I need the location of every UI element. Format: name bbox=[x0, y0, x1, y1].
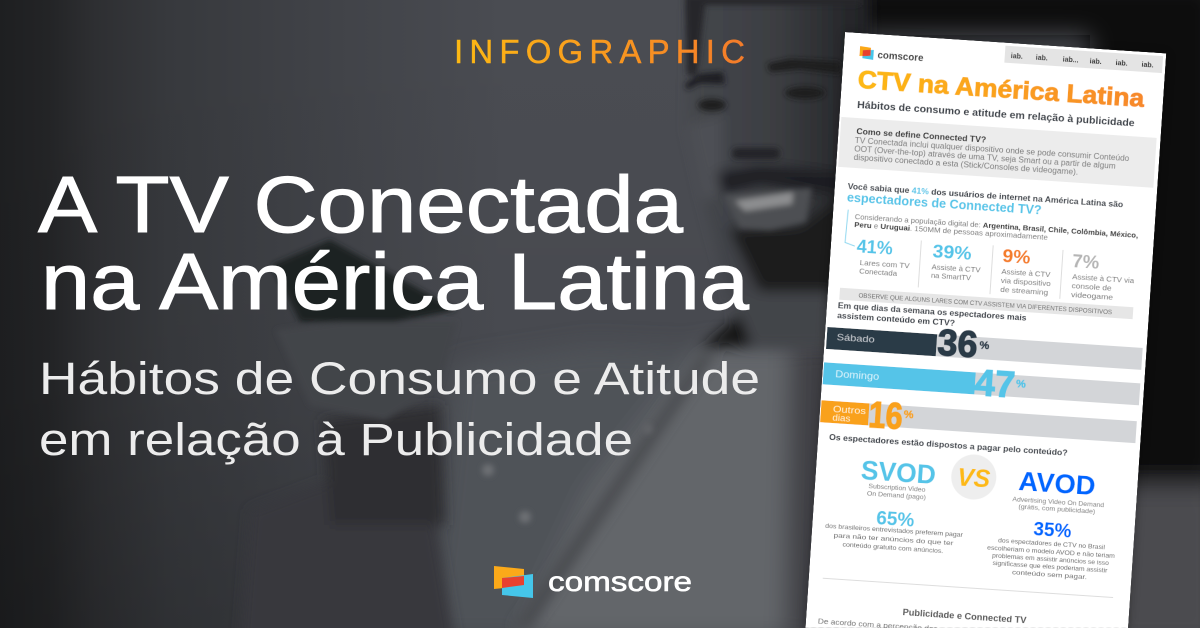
AVOD heading: (grátis, com publicidade) bbox=[1018, 505, 1095, 516]
stat: SVOD 65%: conteúdo gratuito com anúncios. bbox=[842, 542, 944, 555]
stat: 39% bbox=[931, 244, 981, 280]
bar: Sábado 36% bbox=[826, 327, 1143, 370]
stat: 41% bbox=[856, 240, 910, 276]
population note: Considerando a população digital de: Argentina, Brasil, Chile, Colômbia, México, bbox=[854, 212, 1138, 240]
bracket line bbox=[844, 210, 855, 247]
stat: 39%: na SmartTV bbox=[931, 271, 971, 282]
stat: AVOD 35%: conteúdo sem pagar. bbox=[1012, 570, 1087, 581]
partner logos strip: iab. bbox=[1115, 60, 1128, 68]
stat: AVOD 35%: 35% bbox=[1033, 519, 1072, 543]
bar: Outros dias 16%: 16 bbox=[867, 394, 904, 437]
sheet shadow bbox=[805, 33, 1166, 628]
stat: 41%: Conectada bbox=[859, 266, 898, 278]
main title: na América Latina bbox=[41, 237, 750, 326]
note bar: OBSERVE QUE ALGUNS LARES COM CTV ASSISTEM VIA DIFERENTES DISPOSITIVOS bbox=[858, 293, 1112, 316]
partner logos strip: iab... bbox=[1062, 56, 1079, 65]
bar: Domingo 47%: 47 bbox=[974, 362, 1016, 405]
partner logos strip: iab. bbox=[1035, 55, 1048, 62]
comscore logo bbox=[494, 566, 692, 598]
question: willingness to pay: Os espectadores estão dispostos a pagar pelo conteúdo? bbox=[829, 432, 1068, 458]
panel: definition: dispositivo conectado a esta (Stick/Consoles de videogame). bbox=[853, 153, 1079, 177]
stat: AVOD 35%: significasse que eles poderiam assistir bbox=[992, 561, 1108, 575]
stat: 7% bbox=[1071, 254, 1134, 300]
sheet logo bbox=[859, 46, 924, 62]
sheet subtitle: Hábitos de consumo e atitude em relação à publicidade bbox=[857, 99, 1135, 129]
AVOD heading: AVOD bbox=[1018, 466, 1096, 501]
bar: Sábado 36%: Sábado bbox=[836, 332, 875, 346]
stat: SVOD 65%: para não ter anúncios do que ter bbox=[833, 533, 953, 547]
stat: 41%: 41% bbox=[856, 236, 893, 259]
infographic sheet preview bbox=[805, 32, 1166, 628]
SVOD heading: SVOD bbox=[860, 455, 937, 490]
bar: Outros dias 16% bbox=[820, 400, 1137, 444]
section: advertising and connected TV: Publicidade e Connected TV bbox=[902, 607, 1027, 626]
VS badge: VS bbox=[956, 463, 991, 494]
question: 41% of users: Você sabia que 41% dos usuários de internet na América Latina são bbox=[847, 181, 1124, 209]
AVOD heading: Advertising Video On Demand bbox=[1012, 497, 1104, 509]
bar: Sábado 36%: 36 bbox=[936, 322, 979, 365]
panel: definition: TV Conectada inclui qualquer dispositivo onde se pode consumir Conteúdo bbox=[855, 136, 1130, 163]
partner logos strip: iab. bbox=[1089, 58, 1102, 66]
VS badge bbox=[952, 454, 996, 500]
subtitle: em relação à Publicidade bbox=[39, 414, 633, 465]
eyebrow label: INFOGRAPHIC: INFOGRAPHIC bbox=[454, 33, 745, 70]
stat: 9% bbox=[1000, 249, 1051, 296]
stat: 9%: de streaming bbox=[1000, 285, 1048, 297]
comscore logo: comscore bbox=[548, 566, 692, 597]
bar: Outros dias 16%: dias bbox=[832, 413, 851, 424]
partner logos strip: iab. bbox=[1141, 62, 1154, 70]
stat: 39%: 39% bbox=[932, 241, 972, 264]
note bar bbox=[839, 288, 1133, 319]
question: 41% of users: espectadores de Connected TV? bbox=[847, 191, 1042, 217]
panel: definition bbox=[838, 117, 1157, 188]
SVOD heading bbox=[861, 460, 935, 501]
subtitle bbox=[39, 353, 760, 465]
stat: 41%: Lares com TV bbox=[859, 258, 910, 270]
bar: Sábado 36%: % bbox=[979, 340, 990, 352]
bar: Domingo 47%: Domingo bbox=[835, 369, 880, 383]
stat: 39%: Assiste à CTV bbox=[931, 262, 981, 274]
stat: AVOD 35% bbox=[987, 522, 1114, 580]
main title: A TV Conectada bbox=[38, 160, 684, 249]
stat: AVOD 35%: dos espectadores de CTV no Brasil bbox=[998, 538, 1105, 551]
bar: Domingo 47%: % bbox=[1016, 378, 1026, 391]
sheet title: CTV na América Latina bbox=[857, 66, 1146, 113]
panel: definition: OOT (Over-the-top) através de uma TV, seja Smart ou a partir de algum bbox=[854, 144, 1116, 171]
stat: SVOD 65%: 65% bbox=[876, 508, 915, 532]
stat: 7%: 7% bbox=[1072, 251, 1100, 273]
partner logos strip bbox=[1004, 46, 1163, 73]
panel: definition: Como se define Connected TV? bbox=[856, 126, 987, 145]
stat: 9%: via dispositivo bbox=[1001, 276, 1051, 288]
stat: AVOD 35%: escolheriam o modelo AVOD e não teriam bbox=[987, 546, 1115, 560]
partner logos strip: iab. bbox=[1011, 53, 1023, 61]
question: days of week: assistem conteúdo em CTV? bbox=[837, 310, 955, 328]
stat: 7%: console de bbox=[1071, 281, 1112, 293]
stat: 9%: 9% bbox=[1002, 246, 1031, 268]
bar: Domingo 47% bbox=[822, 362, 1140, 406]
stat: AVOD 35%: problemas em assistir anúncios se isso bbox=[992, 553, 1110, 567]
stat: 7%: Assiste à CTV via bbox=[1072, 272, 1135, 285]
stat: SVOD 65% bbox=[825, 511, 963, 554]
SVOD heading: Subscription Video bbox=[868, 484, 926, 494]
question: days of week: Em que dias da semana os espectadores mais bbox=[838, 300, 1027, 323]
main title bbox=[38, 160, 750, 326]
stat: 9%: Assiste à CTV bbox=[1001, 267, 1051, 279]
AVOD heading bbox=[1012, 472, 1104, 515]
population note: Peru e Uruguai . 150MM de pessoas aproximadamente bbox=[854, 220, 1048, 242]
sheet logo: comscore bbox=[877, 49, 924, 64]
bar: Outros dias 16%: % bbox=[903, 409, 914, 421]
stat: 7%: videogame bbox=[1071, 290, 1113, 302]
subtitle: Hábitos de Consumo e Atitude bbox=[39, 353, 760, 404]
section: advertising and connected TV bbox=[818, 608, 1027, 628]
SVOD heading: On Demand (pago) bbox=[867, 491, 926, 501]
bar: Outros dias 16%: Outros bbox=[833, 404, 867, 416]
stat: SVOD 65%: dos brasileiros entrevistados preferem pagar bbox=[825, 524, 963, 539]
